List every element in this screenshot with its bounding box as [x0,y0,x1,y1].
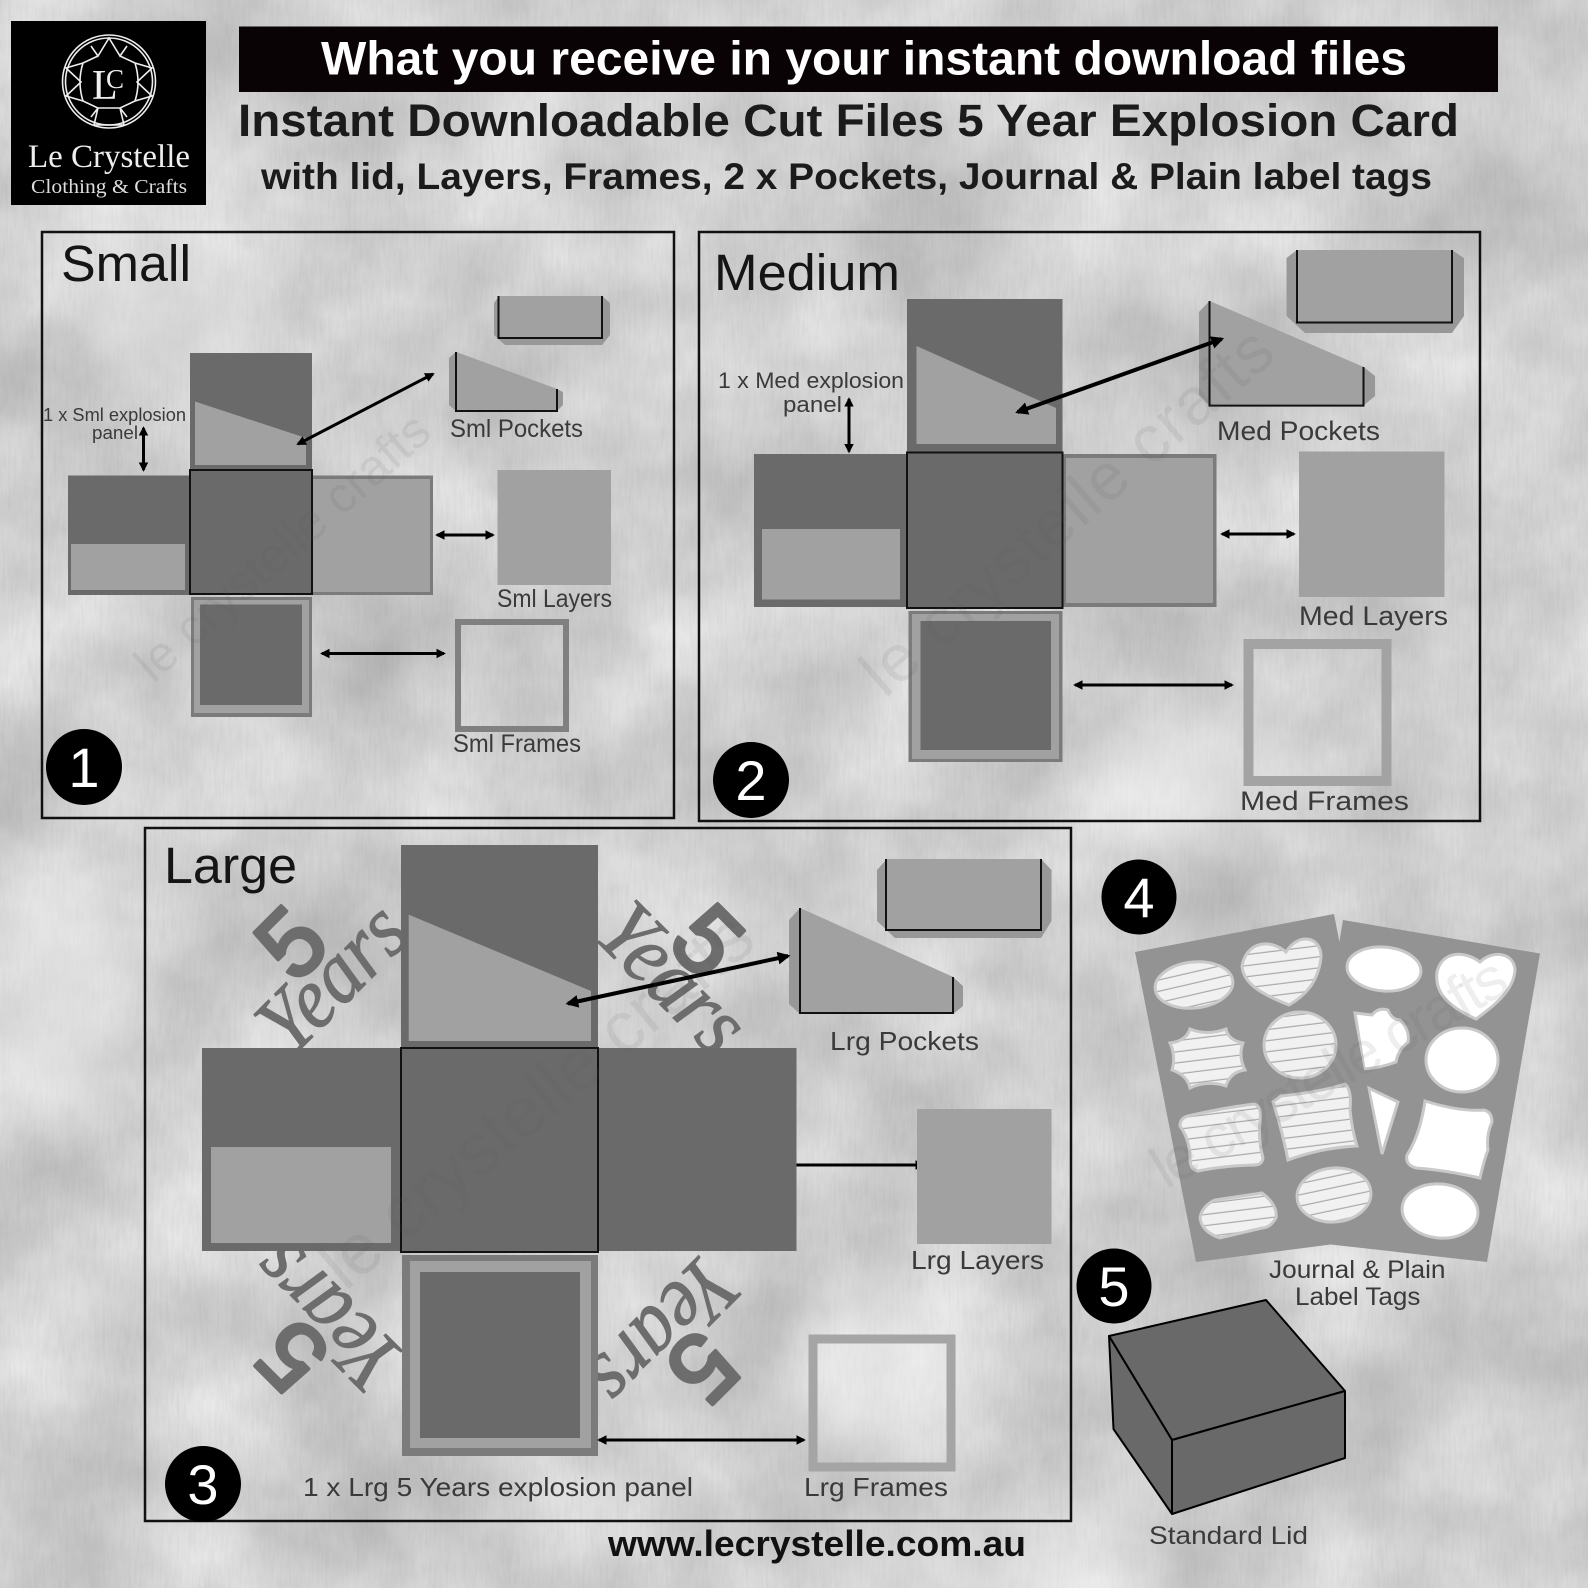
watermarks: le crystelle crafts [846,312,1287,710]
ornament: 5 Years top left: Years [237,883,427,1073]
small pocket arrow [298,374,433,444]
panel: large [145,828,1071,1522]
medium frames label: Med Frames [1240,786,1409,816]
ornament: 5 Years bottom left: 5 [235,1299,349,1412]
small panel label: panel [92,423,138,443]
medium layers label: Med Layers [1299,601,1448,631]
small vertical arrow [142,428,145,470]
medium layers arrow [1222,532,1294,536]
lid label: Standard Lid [1149,1522,1308,1550]
small layers label: Sml Layers [497,585,612,613]
medium pocket rectangle [1286,250,1464,333]
watermarks: le crystelle crafts [1139,943,1519,1201]
subheading: contents: with lid, Layers, Frames, 2 x Pockets, Journal & Plain label tags [260,156,1432,197]
medium left flap [754,454,908,607]
logo monogram: C [106,64,124,94]
logo wordmark: Le Crystelle [28,139,190,175]
medium panel label [718,368,904,417]
logo tagline: Clothing & Crafts [31,176,187,198]
badge 3: 3 [187,1453,219,1516]
badge 5 [1076,1248,1152,1324]
badge 2 [713,742,789,818]
website: www.lecrystelle.com.au [607,1523,1026,1564]
medium panel label: panel [783,392,842,417]
title banner [239,26,1498,92]
large layer sheet [917,1109,1052,1244]
small panel label: 1 x Sml explosion [43,405,186,425]
large layers label: Lrg Layers [911,1245,1044,1275]
badge 5: 5 [1098,1255,1130,1318]
badge 1 [46,729,122,805]
large pocket rectangle [877,859,1052,938]
small title: Small [61,235,191,292]
watermarks: le crystelle crafts [123,402,441,692]
medium layer sheet [1299,452,1444,597]
standard lid box [1109,1300,1345,1514]
journal tag sheet [1135,914,1396,1262]
small right flap [312,476,433,595]
plain tag sheet [1290,920,1540,1262]
large frame [813,1339,951,1467]
medium pocket wedge [1199,301,1375,406]
tag sheets label [1269,1256,1446,1311]
large bottom flap [402,1255,598,1456]
ornament: 5 Years bottom left: Years [232,1220,422,1410]
small pockets label: Sml Pockets [450,415,583,443]
small left flap [68,476,190,595]
ornament: 5 Years bottom right: 5 [645,1311,759,1424]
watermarks: le crystelle crafts [304,896,769,1304]
logo monogram: L [92,63,118,109]
label tag sheets [1135,914,1540,1262]
large frames label: Lrg Frames [804,1472,948,1502]
small layers arrow [437,534,493,536]
medium vertical arrow [848,399,850,452]
medium title: Medium [714,244,900,301]
heading: product line: Instant Downloadable Cut Files 5 Year Explosion Card [238,95,1459,146]
panel: medium [699,232,1480,821]
badge 4 [1102,860,1176,934]
ornament: 5 Years top right: Years [578,883,768,1073]
medium frame [1248,644,1386,781]
medium frames arrow [1075,684,1232,686]
badge 1: 1 [68,736,100,799]
small frames label: Sml Frames [453,730,581,758]
large frames arrow [599,1438,804,1442]
medium pocket arrow [1018,339,1222,412]
small top flap [190,353,312,469]
large right flap [598,1048,796,1251]
ornament: 5 Years top right: 5 [650,884,764,998]
medium centre square [907,452,1062,608]
medium panel label: 1 x Med explosion [718,368,904,393]
title banner: What you receive in your instant download files [321,32,1407,84]
small layer sheet [498,470,611,585]
logo emblem: gem circle [62,35,156,128]
ornament: 5 Years bottom right [568,1236,799,1467]
large top flap [401,845,598,1048]
tag sheets label: Journal & Plain [1269,1256,1446,1284]
small centre square [190,470,312,594]
small frames arrow [322,652,444,655]
large layers arrow [796,1164,923,1166]
medium top flap [907,299,1062,452]
small frame [458,622,566,729]
small bottom flap [191,597,312,717]
ornament: 5 Years top left [196,842,427,1073]
large pockets label: Lrg Pockets [830,1026,979,1056]
small pocket rectangle [494,296,610,345]
logo [11,21,206,205]
tag sheets label: Label Tags [1295,1283,1420,1311]
large panel label: 1 x Lrg 5 Years explosion panel [303,1472,693,1502]
badge 4: 4 [1123,866,1155,929]
medium right flap [1062,454,1216,607]
ornament: 5 Years bottom left [191,1220,422,1451]
large pocket wedge [789,908,963,1014]
panel: small [42,232,674,818]
large left flap [202,1048,401,1251]
ornament: 5 Years top left: 5 [235,886,348,1000]
small panel label [43,405,186,443]
large title: Large [164,837,297,894]
large pocket arrow [568,956,788,1004]
badge 3 [165,1446,241,1522]
ornament: 5 Years bottom right: Years [568,1236,758,1426]
watermarks [123,312,1519,1304]
small pocket wedge [449,352,563,411]
badge 2: 2 [735,749,767,812]
medium bottom flap [908,611,1062,762]
large centre square [401,1048,598,1252]
medium pockets label: Med Pockets [1217,416,1380,446]
